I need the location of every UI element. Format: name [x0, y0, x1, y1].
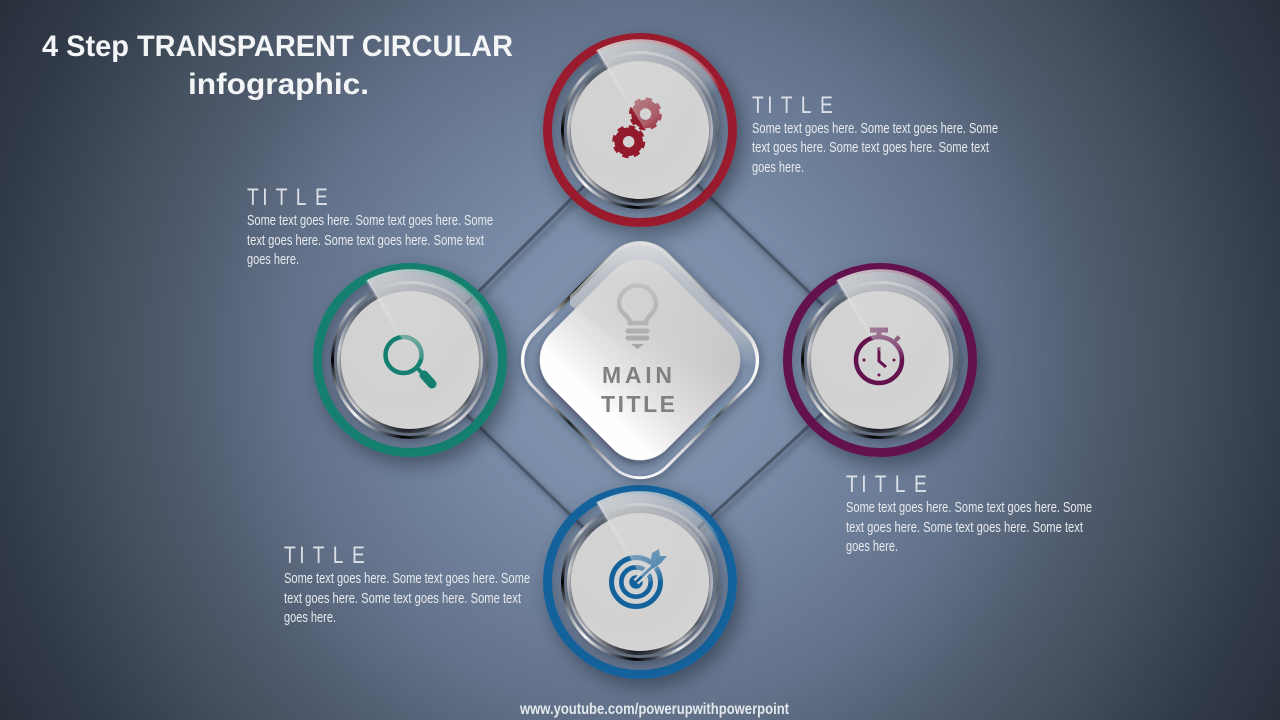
- text block: left step: Some text goes here. Some text goes here. Some: [247, 212, 493, 229]
- heading: [42, 30, 513, 101]
- text block: top step: Some text goes here. Some text goes here. Some: [752, 120, 998, 137]
- text block: bottom step: [284, 541, 530, 626]
- icon: stopwatch: [856, 330, 902, 383]
- glass wedge: [837, 269, 970, 360]
- center diamond with bulb and main title: [534, 242, 756, 469]
- center diamond metallic frame: [520, 240, 760, 480]
- text block: right step: Some text goes here. Some text goes here. Some: [846, 499, 1092, 516]
- heading: 4 Step TRANSPARENT CIRCULAR: [42, 30, 513, 63]
- text block: bottom step: text goes here. Some text goes here. Some text: [284, 590, 522, 607]
- icon: target with arrow: [612, 549, 667, 606]
- main title: [601, 362, 675, 417]
- diamond glass overlay: [570, 242, 756, 362]
- glass wedge: [597, 39, 730, 130]
- icon: light bulb: [619, 286, 656, 349]
- text block: bottom step: TITLE: [284, 541, 365, 569]
- text block: top step: TITLE: [752, 91, 833, 119]
- text block: bottom step: Some text goes here. Some text goes here. Some: [284, 570, 530, 587]
- glass wedge: [597, 491, 730, 582]
- icon: magnifier: [386, 337, 432, 384]
- text block: right step: text goes here. Some text goes here. Some text: [846, 519, 1084, 536]
- text block: top step: goes here.: [752, 159, 804, 176]
- text block: bottom step: goes here.: [284, 609, 336, 626]
- step circle: bottom (target, blue): [540, 484, 752, 695]
- step circle: top (gears, red): [540, 32, 752, 244]
- main title: TITLE: [601, 391, 675, 417]
- text block: right step: TITLE: [846, 470, 927, 498]
- inner diamond: [524, 244, 756, 476]
- text block: right step: [846, 470, 1092, 555]
- text block: right step: goes here.: [846, 538, 898, 555]
- glass wedge: [367, 269, 500, 360]
- center diamond frame shadow: [504, 224, 776, 496]
- main title: MAIN: [602, 362, 672, 388]
- footer url: www.youtube.com/powerupwithpowerpoint: [519, 701, 790, 718]
- text block: left step: text goes here. Some text goes here. Some text: [247, 232, 485, 249]
- heading: infographic.: [188, 68, 369, 101]
- text block: top step: [752, 91, 998, 176]
- text block: left step: goes here.: [247, 251, 299, 268]
- text block: left step: TITLE: [247, 183, 328, 211]
- icon: gears: [615, 100, 660, 156]
- step circle: left (magnifier, teal): [310, 262, 522, 474]
- step circle: right (stopwatch, purple): [780, 262, 991, 474]
- text block: top step: text goes here. Some text goes here. Some text: [752, 139, 990, 156]
- text block: left step: [247, 183, 493, 268]
